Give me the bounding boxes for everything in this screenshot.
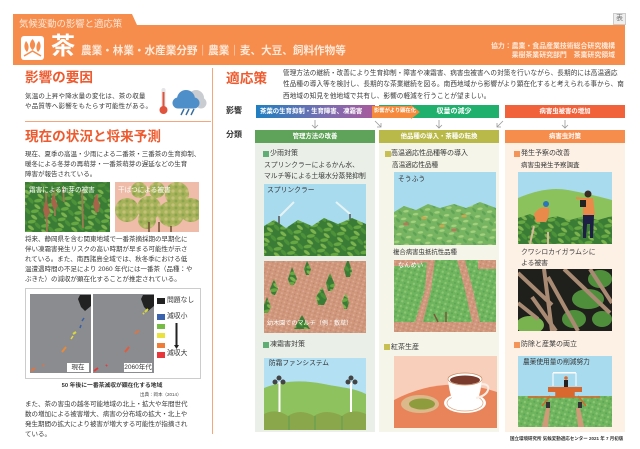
label: soufu: そうふう — [398, 176, 425, 183]
cooperation credit: 果樹茶業研究部門 茶業研究領域 — [512, 52, 615, 58]
scene: survey — [518, 172, 612, 244]
label: survey: 病害虫発生予察調査 — [521, 162, 580, 169]
figure: yield loss maps — [25, 288, 201, 379]
text: pests: また、茶の害虫の越冬可能地域の北上・拡大や年間世代 — [25, 401, 188, 408]
icon: tea leaves — [21, 36, 44, 60]
label: sprinkler: スプリンクラー — [267, 187, 315, 194]
text: current state: 現在、夏季の高温・少雨による二番茶・三番茶の生育抑制、 — [25, 151, 200, 158]
icon: rain cloud — [172, 90, 206, 116]
legend label: large loss: 減収大 — [167, 350, 187, 357]
text: current state: 暖冬による冬芽の再萌芽・一番茶萌芽の遅延などの生育 — [25, 161, 187, 168]
category header — [379, 130, 499, 143]
panel: management — [255, 130, 375, 432]
text: adaptation summary: 西地域の知見を他地域で共有し、影響の軽減を行うことが望ましい。 — [283, 92, 491, 100]
cooperation credit: 協力：農業・食品産業技術総合研究機構 — [491, 43, 615, 50]
text: pests: ている。 — [25, 431, 51, 438]
subheading: control and industry: 防除と産業の両立 — [521, 341, 577, 348]
marker — [263, 151, 269, 157]
heading: adaptation: 適応策 — [226, 71, 267, 86]
map: 2060s — [93, 294, 154, 373]
description: スプリンクラーによるかん水、 — [264, 162, 359, 169]
impact bar: yield decrease — [379, 105, 499, 118]
banner tab label: 気候変動の影響と適応策 — [19, 18, 122, 29]
category header: 管理方法の改善 — [293, 133, 337, 140]
text: future projection — [25, 236, 192, 283]
scene: sprinkler — [264, 184, 366, 256]
photo: frost damage — [25, 182, 110, 232]
page tag — [613, 13, 626, 25]
text: pests — [25, 400, 188, 438]
scene: nanmei — [394, 260, 496, 332]
category header — [505, 130, 625, 143]
scene: pesticide reduction — [518, 356, 612, 427]
text: future projection: ぶきた）の減収が顕在化することが推定されている。 — [25, 276, 181, 283]
cooperation credit — [491, 42, 615, 58]
marker — [384, 344, 390, 350]
divider — [25, 121, 211, 122]
text: adaptation summary — [283, 69, 624, 100]
impact bar: yield decrease: 収量の減少 — [436, 108, 472, 115]
page tag: 表 — [616, 15, 623, 22]
panel: left column — [25, 68, 213, 434]
subheading: black tea: 紅茶生産 — [391, 344, 419, 351]
legend label: small loss: 減収小 — [167, 313, 187, 320]
label: disease resistant variety: 複合病害虫抵抗性品種 — [393, 249, 457, 256]
label: present: 現在 — [72, 364, 84, 371]
scene: soufu — [394, 172, 496, 245]
category header: 病害虫対策 — [549, 133, 581, 140]
label: pesticide reduction: 農薬使用量の削減努力 — [523, 359, 590, 366]
marker — [263, 342, 269, 348]
label: 2060s: 2060年代 — [124, 364, 152, 371]
scene: scale insects — [518, 269, 612, 331]
category header — [255, 130, 375, 143]
arrow: more apparent — [372, 105, 420, 119]
sector text: 農業・林業・水産業分野｜農業｜麦、大豆、飼料作物等 — [81, 45, 346, 57]
row label: impact: 影響 — [226, 106, 242, 115]
crop name: 茶 — [51, 33, 75, 60]
text: adaptation summary: 性品種の導入等を検討し、長期的な茶業継続を図る。南西地域から影響がより顕在化すると考えられる事から、南 — [283, 81, 624, 88]
caption: 50 年後に一番茶減収が顕在化する地域 — [62, 383, 162, 389]
arrow label: 影響がより顕在化 — [374, 108, 416, 114]
text: pests: 数の増加による被害増大、病害の分布域の拡大・北上や — [25, 411, 187, 418]
label: mulberry scale line 1 and 2: クワシロカイガラムシに — [521, 249, 596, 256]
impact bar: growth inhibition — [256, 105, 375, 118]
legend — [157, 296, 194, 358]
text: adaptation summary: 管理方法の継続・改善により生育抑制・障害や凍霜害、病害虫被害への対策を行いながら、長期的には高温適応 — [283, 70, 618, 76]
arrows: impact to classification — [312, 120, 568, 128]
scene: frost fan — [264, 358, 366, 430]
impact bar: growth inhibition: 茶葉の生育抑制・生育障害、凍霜害 — [260, 108, 362, 115]
text: future projection: 温遭遇時間の不足により 2060 年代には一番茶（品種：や — [25, 266, 192, 273]
text: impact factors: 気温の上昇や降水量の変化は、茶の収量 — [25, 93, 146, 100]
description — [264, 161, 366, 180]
text: future projection: 伴い凍霜害発生リスクの高い時期が早まる可能性が示さ — [25, 246, 188, 253]
category header: 他品種の導入・茶種の転換 — [401, 133, 477, 140]
panel: pest control — [505, 130, 625, 432]
source: 出典：岡本（2014） — [140, 392, 182, 397]
text: current state: 障害が報告されている。 — [25, 171, 96, 178]
label: present — [67, 363, 89, 372]
label: frost fan: 防霜ファンシステム — [269, 360, 329, 367]
scene: mulch — [264, 261, 366, 333]
label: mulberry scale line 1 and 2 — [521, 248, 596, 267]
photo: drought damage — [115, 182, 199, 232]
subheading: heat tolerant: 高温適応性品種等の導入 — [391, 150, 468, 157]
marker — [514, 342, 520, 348]
text: future projection: 将来、静岡県を含む関東地域で一番茶摘採期の早期化に — [25, 236, 188, 243]
heading: current state and projections: 現在の状況と将来予測 — [25, 129, 161, 144]
subheading: frost: 凍霜害対策 — [270, 341, 305, 348]
subheading: forecasting: 発生予察の改善 — [521, 150, 570, 157]
scene: black tea — [394, 356, 497, 428]
label: mulberry scale line 1 and 2: よる被害 — [521, 260, 548, 267]
text: current state — [25, 150, 200, 178]
row label: classification: 分類 — [226, 130, 242, 139]
label: mulch: 幼木園でのマルチ（例：敷草） — [267, 320, 352, 327]
description: マルチ等による土壌水分蒸発抑制 — [264, 173, 366, 180]
footer credit: 国立環境研究所 気候変動適応センター 2021 年 7 月初版 — [510, 436, 623, 441]
map: present — [30, 294, 91, 373]
icon: thermometer — [160, 88, 168, 114]
label: drought damage: 干ばつによる被害 — [118, 187, 171, 194]
marker — [514, 151, 520, 157]
label: heat tolerant variety: 高温適応性品種 — [392, 162, 438, 169]
text: future projection: れている。また、南西諸島全域では、秋冬季における低 — [25, 256, 187, 263]
legend label: no issue: 問題なし — [167, 297, 194, 304]
label: frost damage: 霜害による新芽の被害 — [29, 187, 95, 194]
banner — [13, 14, 625, 65]
impact bar: pest increase: 病害虫被害の増加 — [539, 108, 591, 115]
text: pests: 発生期間の拡大により被害が増大する可能性が指摘され — [25, 421, 187, 428]
text: impact factors — [25, 92, 152, 110]
impact bar: pest increase — [505, 105, 625, 118]
label: nanmei: なんめい — [398, 262, 423, 269]
subheading: low rainfall: 少雨対策 — [270, 150, 298, 157]
panel: varieties — [379, 130, 499, 432]
marker — [385, 151, 391, 157]
heading: impact factors: 影響の要因 — [25, 70, 93, 85]
text: impact factors: や品質等へ影響をもたらす可能性がある。 — [25, 103, 152, 110]
